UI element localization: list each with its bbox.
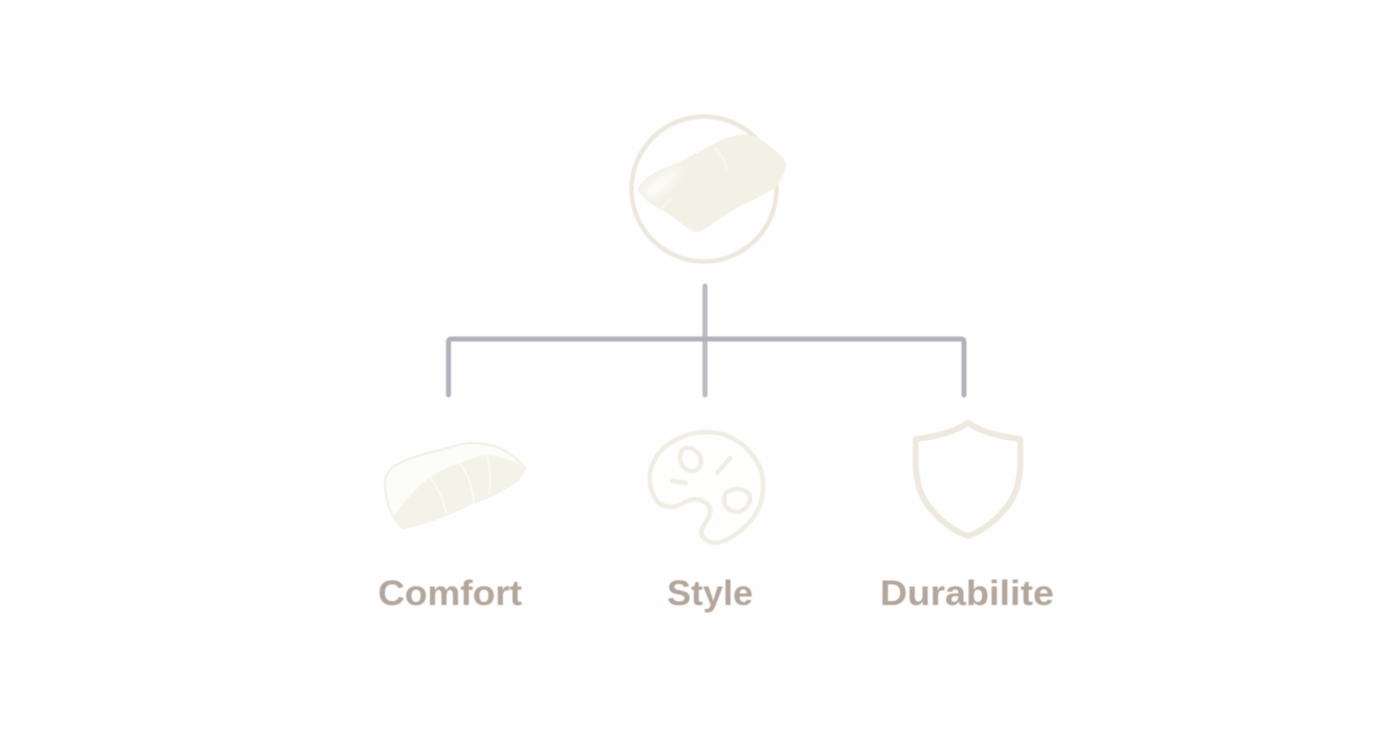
pillow (638, 135, 786, 232)
label: Durabilite: Durabilite (880, 574, 1054, 613)
icon: shield (916, 422, 1020, 536)
label: Comfort: Comfort (378, 574, 522, 613)
circle outline (632, 116, 776, 262)
icon: palette (650, 432, 763, 543)
icon: comfort pillow (385, 443, 525, 528)
label: Style: Style (667, 574, 753, 613)
connector tree (448, 286, 964, 395)
top icon: pillow in circle (632, 116, 786, 262)
